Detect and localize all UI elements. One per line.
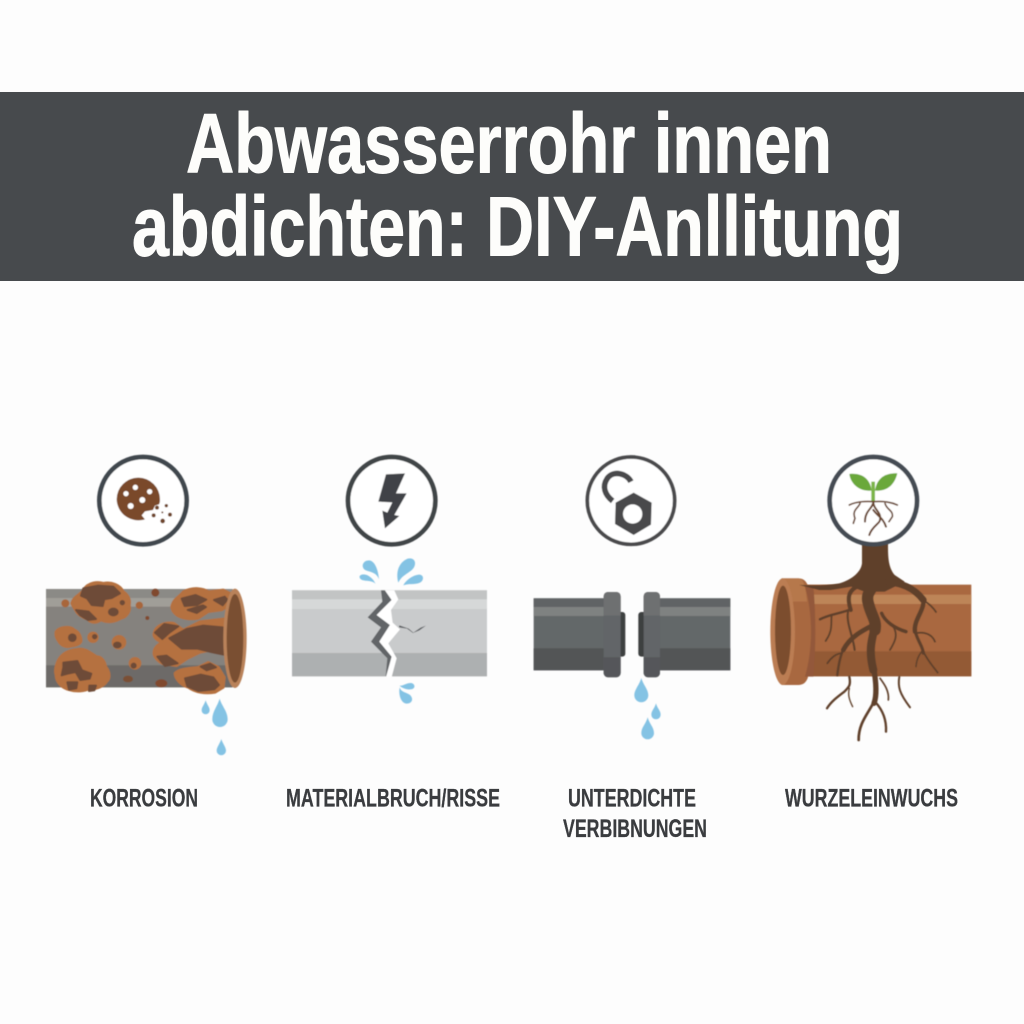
title xyxy=(132,96,903,274)
label: Wurzeleinwuchs: WURZELEINWUCHS xyxy=(785,784,958,812)
panel: Undichte Verbindungen xyxy=(534,457,730,843)
cracked pipe xyxy=(292,590,487,677)
water drops xyxy=(634,678,661,739)
water splashes xyxy=(360,558,423,704)
roots xyxy=(799,543,938,740)
icon: ring and hex nut xyxy=(587,457,675,544)
separated pipe joint xyxy=(534,592,730,677)
title: Abwasserrohr innen xyxy=(186,96,832,190)
icon: crumbling rust disc xyxy=(99,457,187,544)
label: Korrosion: KORROSION xyxy=(90,784,198,812)
label: Materialbruch/Risse: MATERIALBRUCH/RISSE xyxy=(286,784,500,812)
water drops xyxy=(202,699,228,755)
icon: lightning bolt xyxy=(348,457,435,544)
icon: seedling with roots xyxy=(830,457,917,544)
label: Undichte Verbindungen: UNTERDICHTE xyxy=(568,784,696,812)
label: Undichte Verbindungen: VERBIBNUNGEN xyxy=(563,815,707,843)
panel: Wurzeleinwuchs xyxy=(770,457,971,812)
label: Undichte Verbindungen xyxy=(563,784,707,843)
rusty pipe xyxy=(46,582,247,693)
panel: Korrosion xyxy=(46,457,247,812)
title banner xyxy=(0,92,1024,281)
panel: Materialbruch/Risse xyxy=(286,457,500,812)
root pipe xyxy=(770,578,971,685)
